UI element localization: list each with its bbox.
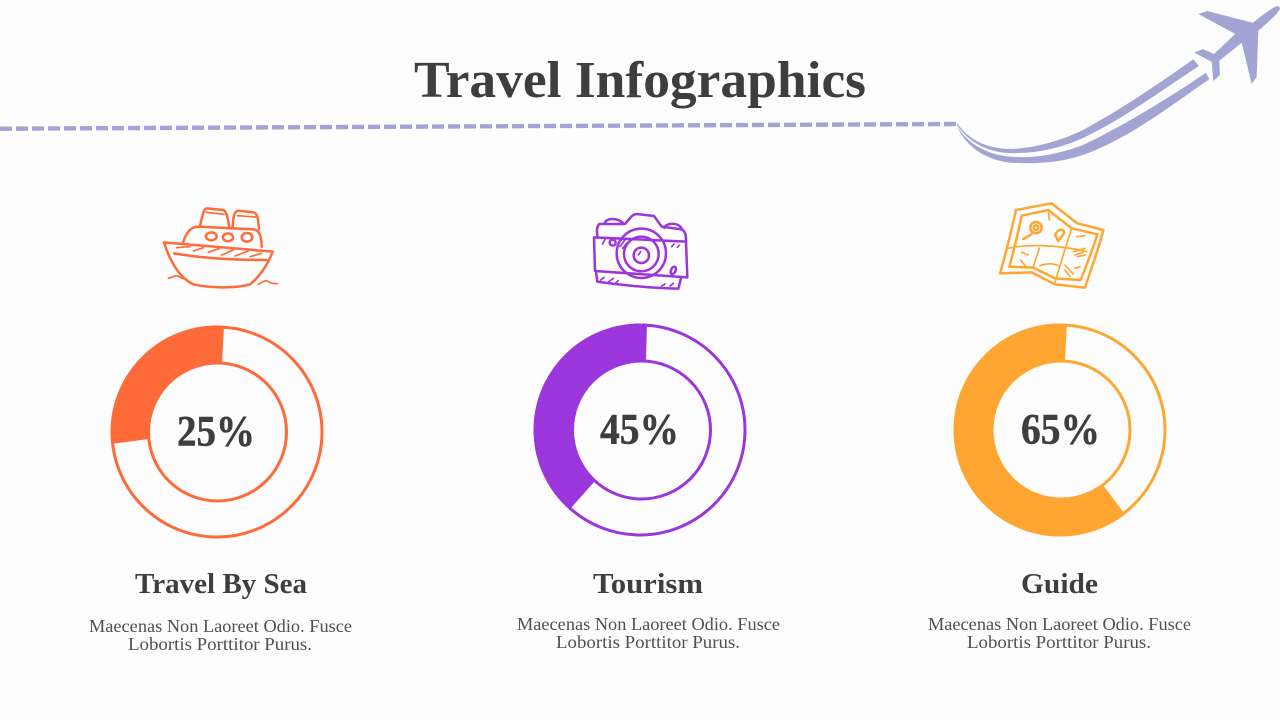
description — [89, 616, 352, 654]
donut chart: 45% — [534, 323, 745, 535]
description: Lobortis Porttitor Purus. — [128, 634, 312, 654]
donut chart: 45%: 45% — [600, 406, 679, 454]
description: Maecenas Non Laoreet Odio. Fusce — [517, 614, 780, 634]
panel: travel by sea — [89, 208, 352, 654]
icon: airplane with contrails — [957, 6, 1280, 163]
icon: map — [1000, 203, 1103, 288]
icon: ship — [164, 208, 277, 287]
description: Maecenas Non Laoreet Odio. Fusce — [928, 614, 1191, 634]
panel: tourism — [517, 214, 780, 652]
description: Lobortis Porttitor Purus. — [556, 632, 740, 652]
title: Travel Infographics — [414, 52, 866, 109]
description — [517, 614, 780, 652]
dashed flight path — [0, 124, 957, 129]
panel: guide — [928, 203, 1191, 652]
donut chart: 25%: 25% — [177, 408, 255, 456]
heading: guide: Guide — [1021, 569, 1098, 600]
heading: tourism: Tourism — [593, 569, 703, 600]
donut chart: 65% — [954, 323, 1165, 536]
icon: camera — [594, 214, 687, 289]
donut chart: 25% — [111, 325, 322, 537]
donut chart: 65%: 65% — [1021, 406, 1100, 454]
description: Maecenas Non Laoreet Odio. Fusce — [89, 616, 352, 636]
description — [928, 614, 1191, 652]
description: Lobortis Porttitor Purus. — [967, 632, 1151, 652]
heading: travel by sea: Travel By Sea — [135, 569, 307, 600]
